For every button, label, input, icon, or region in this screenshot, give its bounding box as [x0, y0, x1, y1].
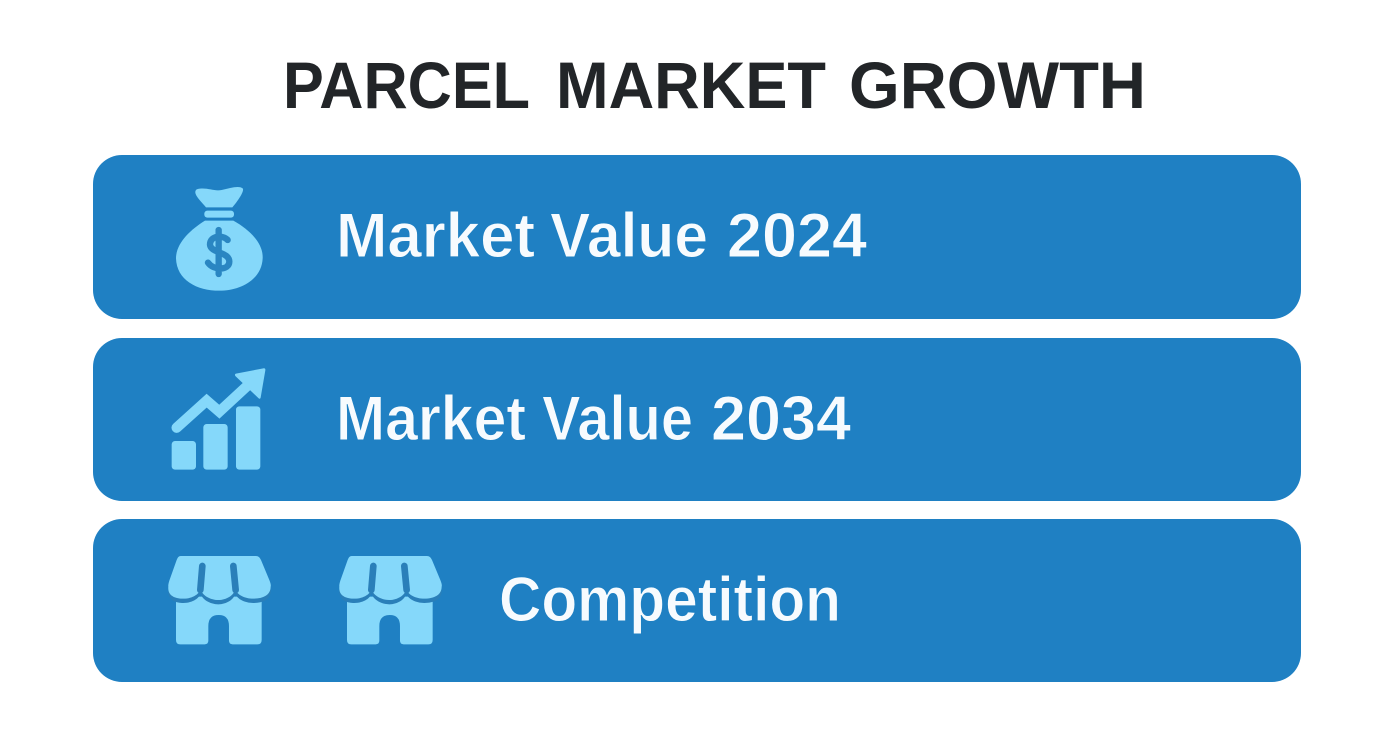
label: market value 2034 [336, 384, 851, 454]
label: market value 2034: Value [542, 384, 693, 454]
label: market value 2034: 2034 [711, 384, 851, 454]
label: competition: Competition [499, 565, 841, 635]
title: GROWTH [849, 48, 1146, 122]
label: market value 2024: Value [550, 201, 708, 271]
icon: storefront left [168, 556, 271, 644]
panel: competition [93, 519, 1301, 682]
label: market value 2024 [336, 201, 867, 271]
label: market value 2024: Market [336, 201, 535, 271]
panel: market value 2024 [93, 155, 1301, 319]
title: PARCEL [283, 48, 530, 122]
title: MARKET [556, 48, 826, 122]
icon: growth chart [172, 368, 265, 470]
title [283, 48, 1146, 122]
panel: market value 2034 [93, 338, 1301, 501]
icon: storefront right [339, 556, 442, 644]
label: market value 2024: 2024 [727, 201, 867, 271]
label: market value 2034: Market [336, 384, 526, 454]
icon: money bag [176, 187, 263, 291]
